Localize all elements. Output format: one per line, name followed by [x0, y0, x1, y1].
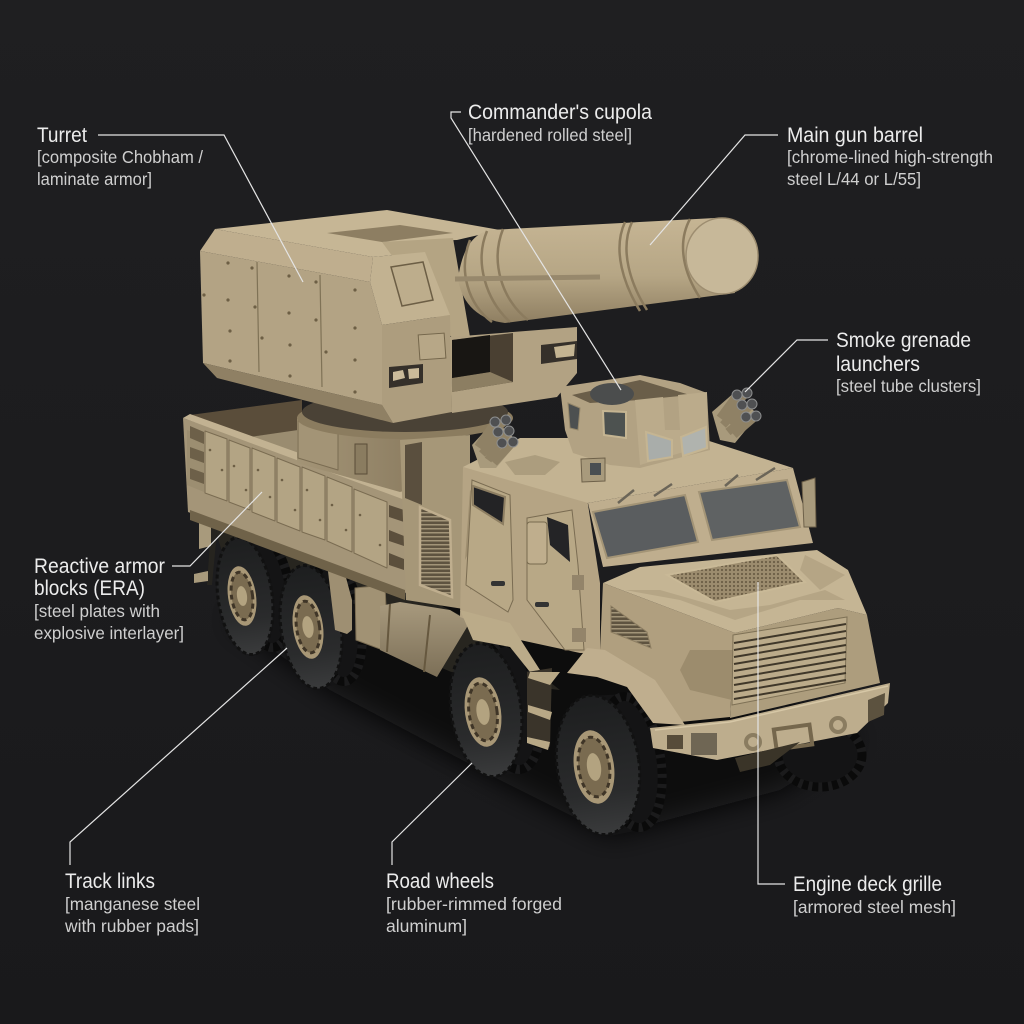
right windshield: [699, 480, 800, 540]
side mirror: [527, 522, 547, 564]
smoke launcher left: [472, 415, 518, 468]
ground shadow: [230, 540, 860, 835]
rear fender and steps: [460, 610, 560, 750]
turret opening: [452, 333, 513, 392]
callout: reactive armor blocks: [34, 492, 262, 643]
illustration: armored truck with turret: [183, 210, 890, 840]
callout: road wheels: [rubber-rimmed forged: [386, 894, 562, 914]
main gun barrel: [455, 218, 758, 323]
callout: main gun barrel: steel L/44 or L/55]: [787, 169, 921, 189]
callout: engine deck grille: [armored steel mesh]: [793, 897, 956, 917]
callout: smoke grenade launchers: [steel tube clusters]: [836, 376, 981, 396]
turret wedge behind barrel: [382, 238, 470, 338]
callout: reactive armor blocks: [steel plates with: [34, 601, 160, 621]
callout: road wheels: aluminum]: [386, 916, 467, 936]
callout: commander's cupola: [hardened rolled steel]: [468, 125, 632, 145]
rear wheel 2: [273, 559, 369, 693]
door window: [473, 486, 505, 524]
callout: track links: [manganese steel: [65, 894, 200, 914]
front louvered grille: [732, 617, 847, 705]
callout: turret: laminate armor]: [37, 169, 152, 189]
callout: engine deck grille: [758, 582, 956, 917]
truck bed: [183, 400, 408, 600]
callout: reactive armor blocks: Reactive armor: [34, 555, 165, 578]
windshield frame: [588, 468, 813, 567]
door hinges: [572, 575, 586, 642]
callout: reactive armor blocks: blocks (ERA): [34, 577, 145, 600]
left windshield: [593, 495, 698, 558]
wipers: [618, 468, 775, 503]
smoke launcher right: [712, 388, 761, 443]
fuel tank and storage boxes: [327, 563, 470, 677]
side hood vent: [611, 606, 651, 648]
far front wheel: [778, 723, 862, 787]
front rear-axle wheel: [442, 639, 549, 781]
roof camouflage: [505, 455, 560, 475]
rear wheel 1: [210, 533, 298, 658]
commander's cupola: [560, 375, 710, 482]
cab side: [460, 467, 600, 653]
callout: main gun barrel: [chrome-lined high-strength: [787, 147, 993, 167]
bed end slots: [187, 426, 404, 570]
engine deck grille: [667, 555, 805, 602]
turret ring: [297, 392, 513, 439]
callout: road wheels: [386, 763, 562, 936]
callout: track links: with rubber pads]: [64, 916, 199, 936]
hull between bed and cab: [400, 435, 470, 610]
callout: road wheels: Road wheels: [386, 870, 494, 893]
callout: smoke grenade launchers: Smoke grenade: [836, 329, 971, 352]
callout: smoke grenade launchers: launchers: [836, 353, 920, 376]
callout: turret: [composite Chobham /: [37, 147, 203, 167]
chassis underside: [205, 500, 560, 690]
turret: [200, 210, 577, 423]
turret side panels: [200, 251, 382, 405]
front fender: [567, 648, 685, 725]
callout: main gun barrel: Main gun barrel: [787, 124, 923, 147]
callout: engine deck grille: Engine deck grille: [793, 873, 942, 896]
right mirror: [802, 478, 816, 527]
second vent block: [541, 341, 577, 364]
callout: commander's cupola: Commander's cupola: [468, 101, 652, 124]
cab roof: [463, 438, 793, 503]
reactive armor blocks: [205, 431, 387, 568]
barrel muzzle cap: [686, 218, 758, 294]
turret hatch: [327, 225, 453, 242]
hood left face: [600, 583, 735, 722]
callout: smoke grenade launchers: [745, 329, 981, 396]
turret hatch plate: [391, 262, 433, 306]
callout: reactive armor blocks: explosive interlayer]: [34, 623, 184, 643]
hood front face: [730, 608, 880, 718]
callout: commander's cupola: [451, 101, 652, 390]
hood camouflage: [625, 555, 845, 620]
rear bumper brackets: [194, 512, 218, 585]
callout: main gun barrel: [650, 124, 993, 245]
callout: turret: Turret: [37, 124, 87, 147]
callout: turret: [37, 124, 303, 282]
callout: track links: [64, 648, 287, 936]
hood top: [603, 550, 867, 633]
front bumper: [650, 683, 890, 772]
turret base pedestal: [297, 417, 460, 492]
turret vent block: [389, 364, 423, 388]
front near wheel: [548, 690, 670, 840]
callout: track links: Track links: [65, 870, 155, 893]
